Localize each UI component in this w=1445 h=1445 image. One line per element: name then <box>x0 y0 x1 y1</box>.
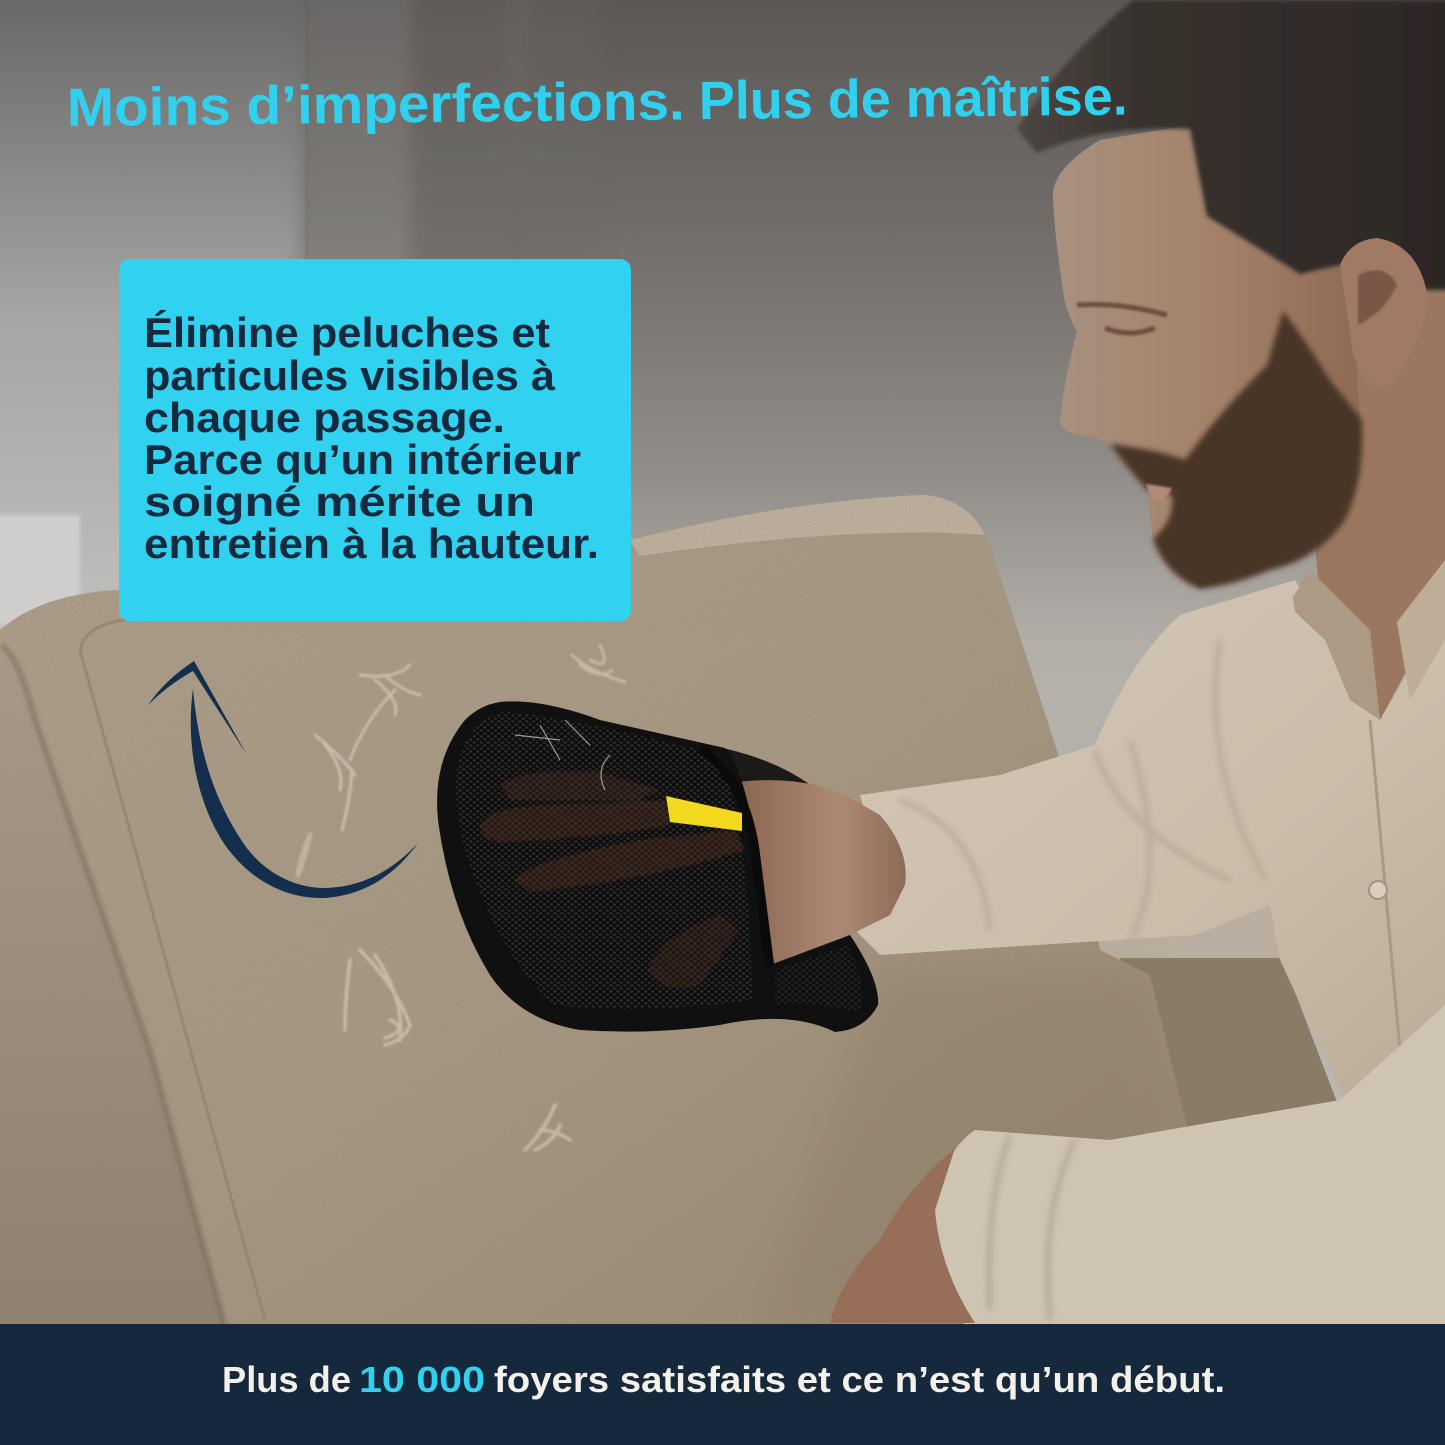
bottom banner <box>0 1324 1445 1445</box>
finger 3 <box>515 830 745 892</box>
finger 4 <box>648 915 740 988</box>
callout panel <box>119 259 631 621</box>
man: lips <box>1146 484 1172 501</box>
callout text: soigné mérite un <box>144 478 535 525</box>
mitt: caught hairs <box>515 720 610 790</box>
mitt with hand <box>437 701 906 1032</box>
sofa: right seat back <box>1120 958 1340 1200</box>
callout text: chaque passage. <box>144 394 505 441</box>
hand and wrist <box>738 780 906 968</box>
title: Moins d’imperfections. <box>66 71 685 138</box>
man: collar right <box>1397 560 1445 700</box>
banner text: foyers satisfaits et ce n’est qu’un début. <box>494 1359 1225 1400</box>
mitt: back layer <box>690 742 825 810</box>
finger 2 <box>480 800 672 842</box>
man: lower hand <box>830 1148 975 1323</box>
man: button <box>1369 881 1387 899</box>
man: lower sleeve <box>933 1005 1445 1325</box>
mitt: lower mesh panel <box>775 945 862 1012</box>
sofa: cushion shading <box>760 970 1188 1325</box>
man: face <box>1053 125 1360 589</box>
man: shirt torso and upper arm <box>850 580 1445 1100</box>
mitt: body <box>437 701 878 1032</box>
man: eye and brow <box>1077 304 1167 333</box>
sofa: fabric grain <box>54 496 984 632</box>
callout text: particules visibles à <box>144 352 556 399</box>
mitt: binding seam <box>700 748 770 968</box>
arrow <box>148 661 418 898</box>
banner text: Plus de <box>222 1359 351 1400</box>
man: cuff fold <box>989 1135 1075 1320</box>
callout text: entretien à la hauteur. <box>144 520 599 567</box>
sofa: back cushion <box>0 495 1188 1330</box>
man: placket <box>1370 720 1400 1050</box>
callout text <box>144 309 599 567</box>
banner text <box>222 1359 1225 1400</box>
sofa: cushion piping <box>80 620 265 1320</box>
man: neck <box>1290 270 1445 720</box>
mitt: fingers under mesh <box>480 771 745 988</box>
mitt: mesh <box>456 712 752 1009</box>
mitt: yellow tag <box>666 796 742 831</box>
finger 1 <box>500 771 660 800</box>
man <box>830 0 1445 1325</box>
banner text: 10 000 <box>359 1359 485 1400</box>
man: shirt folds <box>900 640 1265 940</box>
man: ear <box>1340 238 1428 387</box>
sofa: arm crease shadow <box>2 645 225 1325</box>
sofa <box>0 490 1340 1330</box>
man: beard <box>1110 311 1362 589</box>
callout text: Parce qu’un intérieur <box>144 436 581 483</box>
sofa: cushion top highlight <box>630 495 985 556</box>
pet hair on sofa <box>298 645 625 1150</box>
man: hair <box>1017 0 1445 290</box>
sofa: side arm <box>0 645 225 1325</box>
title: Plus de maîtrise. <box>698 67 1128 131</box>
man: inner ear <box>1358 270 1397 325</box>
callout text: Élimine peluches et <box>144 309 550 356</box>
man: collar <box>1293 570 1380 720</box>
title <box>66 67 1128 138</box>
